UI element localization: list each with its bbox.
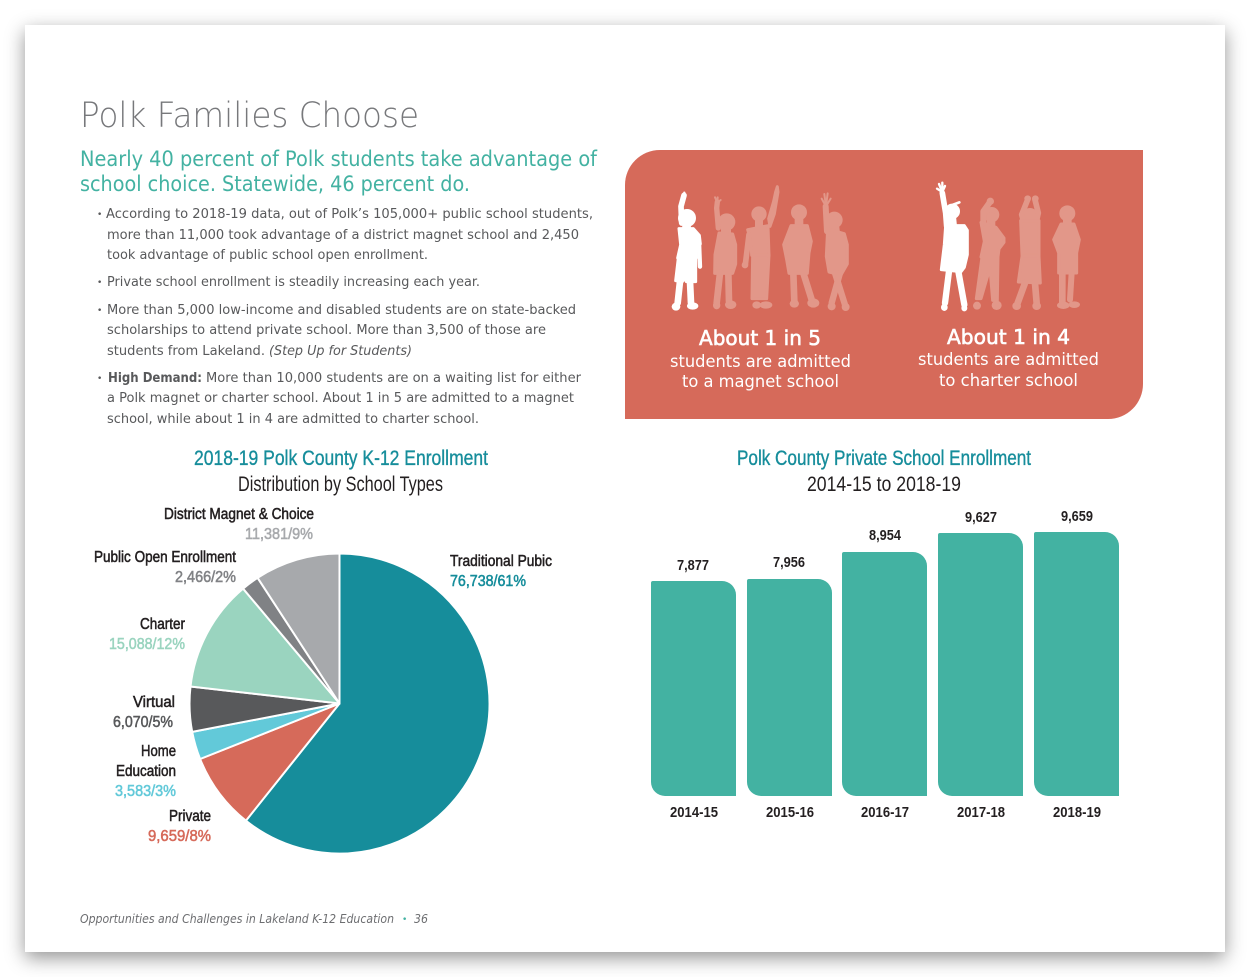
callout: about 1 in 5: students are admitted: [670, 352, 851, 372]
pie chart heading: [194, 447, 488, 496]
child: both arms raised: [1012, 195, 1041, 310]
bullet: high demand: •: [97, 374, 102, 384]
footer: Opportunities and Challenges in Lakeland K-12 Education: [80, 912, 394, 926]
label: virtual: Virtual: [133, 694, 175, 711]
pie chart heading: Distribution by School Types: [238, 473, 443, 496]
bullet: high demand: a Polk magnet or charter school. About 1 in 5 are admitted to a magnet: [107, 390, 574, 406]
bar 2015-16: [747, 554, 832, 821]
subtitle: [80, 147, 598, 196]
subtitle: Nearly 40 percent of Polk students take advantage of: [80, 147, 598, 171]
slice: public open enrollment: [243, 578, 340, 704]
panel background: [625, 150, 1143, 419]
bullet: scholarships: [97, 302, 576, 359]
bar chart heading: [737, 447, 1031, 496]
callout: about 1 in 5: [670, 326, 851, 392]
icon: five children, one highlighted: [672, 187, 850, 311]
bar 2015-16: 2015-16: [766, 804, 814, 821]
slice: traditional public: [246, 554, 490, 853]
label: charter: 15,088/12%: [109, 636, 185, 653]
child: highlighted girl: [937, 183, 967, 311]
pie chart: enrollment by school type: [190, 554, 490, 853]
callout: about 1 in 4: About 1 in 4: [947, 325, 1070, 349]
label: private: Private: [169, 808, 211, 825]
label: traditional public: 76,738/61%: [450, 573, 526, 590]
bullet: private enrollment: •: [97, 278, 102, 288]
child: fist raised: [973, 198, 1004, 310]
subtitle: school choice. Statewide, 46 percent do.: [80, 172, 470, 196]
bullet: 2018-19 data: [97, 206, 593, 263]
bar 2015-16: 7,956: [773, 554, 805, 571]
label: public open enrollment: [94, 549, 236, 586]
slice: home education: [192, 704, 340, 759]
bullet: scholarships: students from Lakeland.: [107, 343, 265, 359]
bullet: scholarships: •: [97, 306, 102, 316]
callout: about 1 in 5: About 1 in 5: [699, 326, 821, 350]
label: home education: Education: [116, 763, 176, 780]
pie labels: [94, 506, 552, 845]
child: hand raised: [713, 197, 736, 309]
bullet text block: [97, 206, 593, 427]
footer: •: [402, 915, 407, 925]
child: standing: [784, 204, 819, 308]
slice: virtual: [190, 686, 340, 732]
slice: district magnet: [258, 554, 340, 704]
bar 2014-15: [651, 557, 736, 821]
child: crossed legs: [822, 193, 850, 311]
bar 2017-18: [938, 509, 1023, 821]
label: private: 9,659/8%: [148, 828, 211, 845]
label: home education: Home: [141, 743, 176, 760]
callout: about 1 in 4: students are admitted: [918, 350, 1099, 370]
label: public open enrollment: 2,466/2%: [175, 569, 236, 586]
label: traditional public: Traditional Pubic: [450, 553, 552, 570]
bar 2014-15: 7,877: [677, 557, 709, 574]
slice: private: [200, 704, 340, 821]
bullet: 2018-19 data: more than 11,000 took advantage of a district magnet school and 2,450: [107, 227, 579, 243]
slice: charter: [190, 589, 340, 704]
label: district magnet: District Magnet & Choice: [164, 506, 314, 523]
label: home education: [115, 743, 176, 800]
bar 2018-19: [1034, 508, 1119, 821]
bullet: high demand: school, while about 1 in 4 are admitted to charter school.: [107, 411, 479, 427]
label: public open enrollment: Public Open Enrollment: [94, 549, 236, 566]
bar chart: private school enrollment: [651, 508, 1119, 821]
bar 2018-19: 2018-19: [1053, 804, 1101, 821]
bullet: high demand: More than 10,000 students are on a waiting list for either: [206, 370, 581, 386]
label: district magnet: 11,381/9%: [245, 526, 313, 543]
label: virtual: 6,070/5%: [113, 714, 173, 731]
label: charter: [109, 616, 186, 653]
bar 2014-15: 2014-15: [670, 804, 718, 821]
callout: about 1 in 4: to charter school: [939, 371, 1078, 391]
callout: about 1 in 4: [918, 325, 1099, 391]
bar 2018-19: 9,659: [1061, 508, 1093, 525]
bar chart heading: 2014-15 to 2018-19: [807, 473, 961, 496]
bar 2016-17: [842, 527, 927, 821]
pie chart heading: 2018-19 Polk County K-12 Enrollment: [194, 447, 488, 470]
bullet: scholarships: scholarships to attend private school. More than 3,500 of those are: [107, 322, 546, 338]
bar 2017-18: 2017-18: [957, 804, 1005, 821]
bullet: high demand: [97, 370, 581, 427]
panel: admission rates: [625, 150, 1143, 419]
bar 2016-17: 2016-17: [861, 804, 909, 821]
bar chart heading: Polk County Private School Enrollment: [737, 447, 1031, 470]
child: pointing up: [742, 187, 778, 309]
bullet: 2018-19 data: According to 2018-19 data, out of Polk’s 105,000+ public school students,: [106, 206, 593, 222]
bullet: high demand: High Demand:: [108, 370, 202, 386]
bullet: 2018-19 data: took advantage of public school open enrollment.: [107, 247, 428, 263]
child: standing: [1054, 205, 1080, 309]
bullet: private enrollment: Private school enrollment is steadily increasing each year.: [107, 274, 480, 290]
icon: four children, one highlighted: [937, 183, 1080, 311]
bullet: 2018-19 data: •: [97, 210, 102, 220]
callout: about 1 in 5: to a magnet school: [682, 372, 839, 392]
child: highlighted: [672, 193, 700, 311]
title: Polk Families Choose: [80, 96, 419, 136]
bullet: scholarships: More than 5,000 low-income and disabled students are on state-backed: [107, 302, 576, 318]
label: home education: 3,583/3%: [115, 783, 176, 800]
label: private: [148, 808, 211, 845]
bar 2017-18: 9,627: [965, 509, 997, 526]
label: traditional public: [450, 553, 552, 590]
bullet: scholarships: (Step Up for Students): [269, 343, 412, 359]
label: district magnet: [164, 506, 314, 543]
bar 2016-17: 8,954: [869, 527, 902, 544]
label: charter: Charter: [140, 616, 186, 633]
label: virtual: [113, 694, 175, 731]
footer: 36: [414, 912, 428, 926]
